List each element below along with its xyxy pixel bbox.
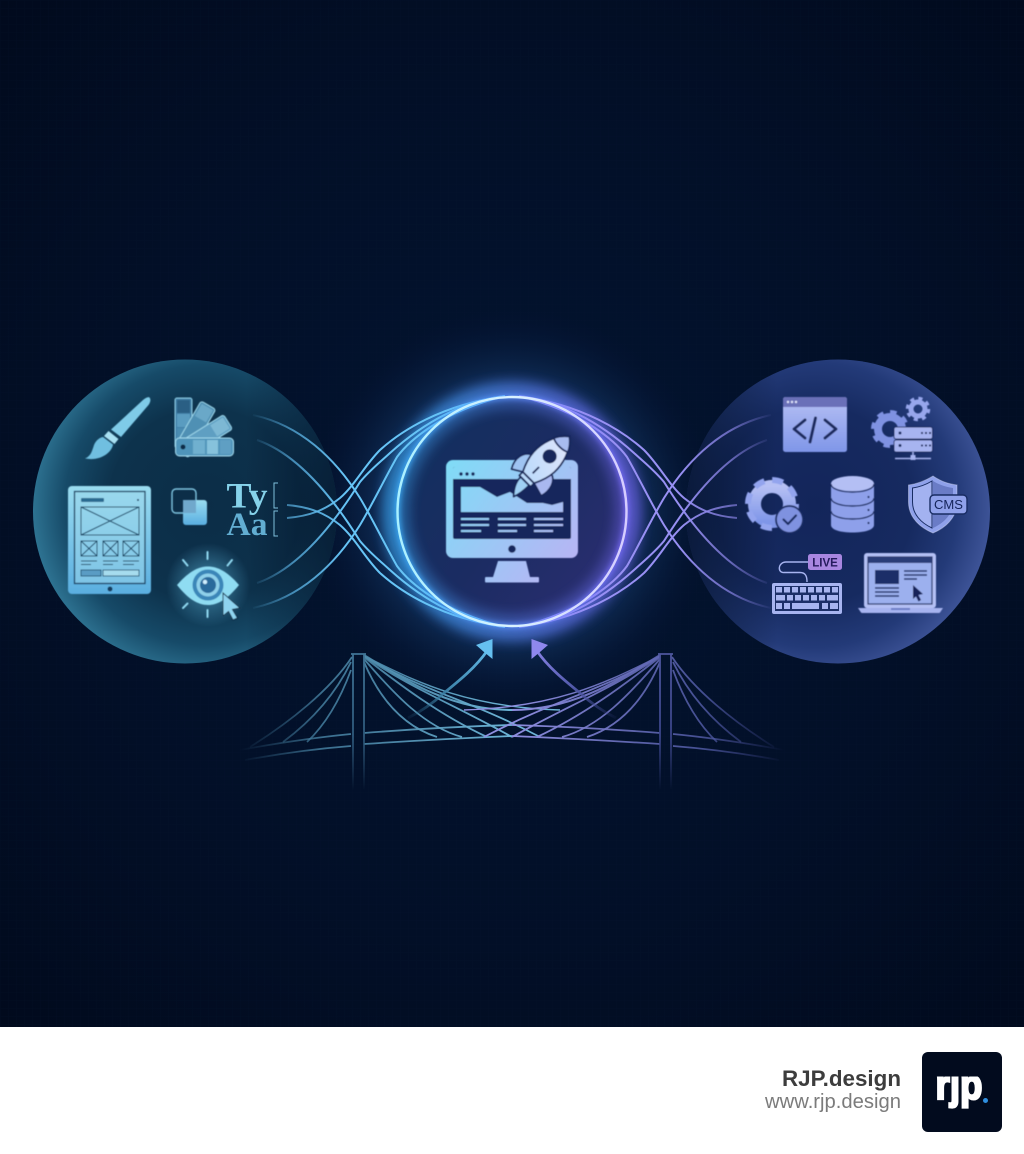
bridge: development side xyxy=(464,654,784,790)
footer logo: rjp xyxy=(936,1061,982,1108)
icon: monitor with rocket xyxy=(446,421,586,582)
icon: overlapping squares xyxy=(172,489,207,525)
icon: typography sample: Aa xyxy=(226,507,268,543)
panel: development circle xyxy=(686,360,990,664)
footer brand text: RJP.design xyxy=(782,1066,901,1091)
connecting strands: development side xyxy=(519,396,771,627)
footer band xyxy=(765,1052,1002,1132)
icon: code window xyxy=(783,397,847,452)
icon: typography sample xyxy=(226,476,278,543)
panel: design circle xyxy=(33,360,337,664)
central ring glow and disc xyxy=(390,390,634,634)
footer brand text: www.rjp.design xyxy=(764,1091,901,1113)
bridge: design side xyxy=(240,654,560,790)
arrow: right rising to centre xyxy=(532,639,616,718)
icon: database xyxy=(831,476,874,532)
icon: gears and server xyxy=(873,398,932,460)
icon: laptop with cursor xyxy=(858,553,943,613)
icon: eye with cursor xyxy=(166,543,250,627)
footer brand text xyxy=(764,1066,901,1113)
connecting strands: design side xyxy=(253,396,505,627)
arrow: left rising to centre xyxy=(408,639,492,718)
footer logo xyxy=(922,1052,1002,1132)
icon: keyboard with live tag xyxy=(772,554,842,614)
icon: keyboard with live tag: LIVE xyxy=(812,558,838,570)
icon: typography sample: Ty xyxy=(226,476,268,516)
icon: rocket xyxy=(496,421,586,511)
icon: gear with check xyxy=(748,480,803,533)
central glowing ring line xyxy=(398,397,626,626)
icon: wireframe tablet xyxy=(68,486,151,594)
icon: colour swatch fan xyxy=(175,398,234,458)
icon: paint brush xyxy=(85,397,150,459)
icon: CMS shield: CMS xyxy=(934,497,963,512)
icon: CMS shield xyxy=(908,476,967,533)
